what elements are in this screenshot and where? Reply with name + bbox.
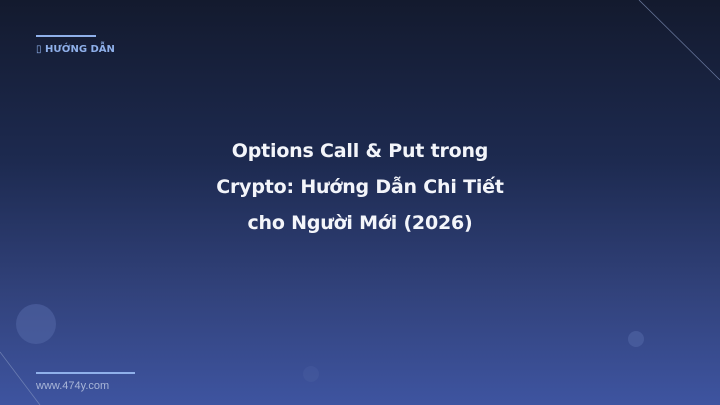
category label: ▯ HƯỚNG DẪN: [36, 44, 115, 55]
title: [216, 140, 504, 234]
title: Crypto: Hướng Dẫn Chi Tiết: [216, 176, 504, 198]
website url: www.474y.com: [36, 380, 109, 392]
title: Options Call & Put trong: [232, 140, 488, 162]
bottom accent line: [36, 372, 135, 374]
top accent line: [36, 35, 96, 37]
title: cho Người Mới (2026): [247, 212, 472, 234]
